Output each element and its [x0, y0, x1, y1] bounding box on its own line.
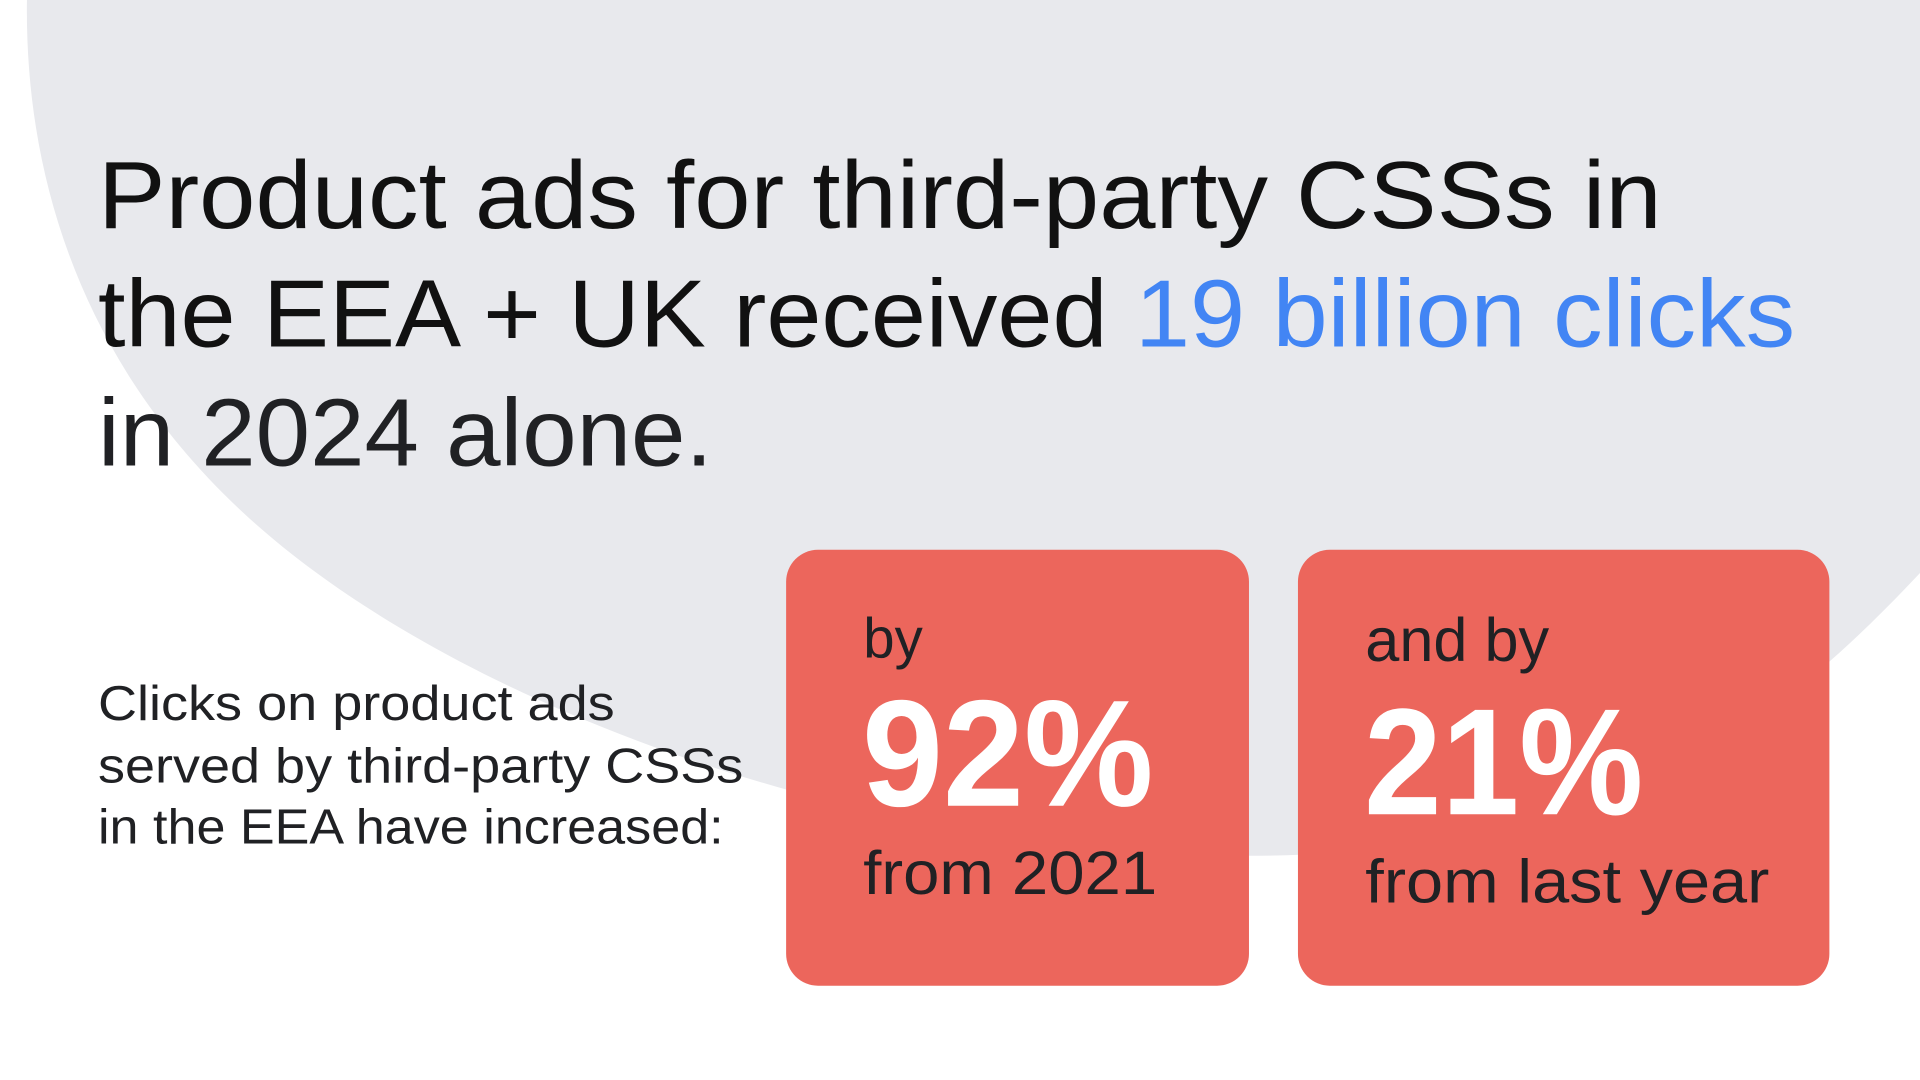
text block: description: Clicks on product ads [98, 677, 615, 731]
text block: description [98, 677, 743, 855]
title: in 2024 alone. [98, 380, 713, 486]
panel: 21%: 21% [1364, 678, 1643, 847]
title: Product ads for third-party CSSs in [98, 143, 1662, 249]
panel: 21%: from last year [1365, 847, 1769, 915]
text block: description: in the EEA have increased: [98, 801, 724, 855]
panel: 92%: from 2021 [863, 839, 1157, 907]
panel: 21% [1298, 550, 1829, 986]
panel: 21%: and by [1365, 606, 1550, 674]
title: the EEA + UK received 19 billion clicks [98, 262, 1795, 368]
text block: description: served by third-party CSSs [98, 739, 743, 793]
panel: 92%: by [863, 607, 924, 670]
panel: 92%: 92% [862, 670, 1153, 839]
background shape [27, 0, 1920, 856]
panel: 92% [786, 550, 1249, 986]
title [98, 143, 1795, 486]
